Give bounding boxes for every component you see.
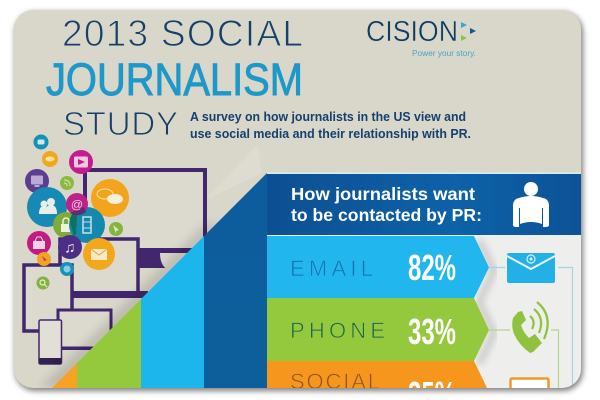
bubble: screen: [25, 169, 49, 193]
icon: social box: [510, 378, 548, 394]
laptop: [58, 310, 118, 350]
strip: orange: [52, 363, 77, 388]
strip: green: [77, 299, 141, 388]
row: email: 82%: [408, 247, 456, 288]
row: email: [267, 236, 489, 298]
header band: [267, 174, 581, 235]
strip: cyan: [141, 236, 204, 388]
bubble: speech: [91, 179, 129, 217]
bubble: music: ♫: [64, 240, 76, 256]
connector: phone: [489, 330, 558, 388]
subtitle: use social media and their relationship with PR.: [190, 127, 471, 141]
bubble: search: [36, 276, 50, 290]
bubble: small chat: [34, 134, 48, 150]
bubble: rss green: [60, 176, 74, 190]
row: phone: PHONE: [290, 318, 385, 343]
phone: [39, 320, 62, 364]
icon: phone: [512, 302, 548, 353]
bubble: cursor: [109, 222, 123, 236]
row: email: EMAIL: [290, 256, 373, 281]
bubble: mail: [83, 238, 115, 270]
desktop screen: [60, 239, 148, 298]
diagonal colour strips: [52, 173, 267, 388]
bubble: users: [27, 187, 67, 227]
social media bubbles: [25, 134, 129, 290]
row shadows: [479, 240, 494, 364]
bubble: film: [69, 207, 105, 243]
title: Journalism: JOURNALISM: [46, 54, 303, 105]
bubble: at sign: [66, 193, 88, 215]
connector: email: [489, 268, 572, 388]
fold shadow: [40, 225, 220, 388]
logo: Cision: Power your story.: [412, 48, 476, 58]
icon: person: [513, 182, 549, 227]
monitor: [85, 170, 205, 271]
panel: how journalists want to be contacted: [267, 172, 581, 400]
bubble: orange chat: [42, 151, 58, 167]
row: social: SOCIAL: [290, 369, 380, 394]
bubble: at sign: @: [71, 198, 83, 212]
title: 2013 Social: 2013 SOCIAL: [62, 13, 303, 54]
header text: to be contacted by PR:: [291, 205, 482, 225]
row: phone: 33%: [408, 311, 456, 352]
subtitle: [190, 110, 471, 141]
bubble: music: [58, 235, 82, 259]
header text: How journalists want: [291, 184, 475, 204]
logo: Cision: CISION: [366, 16, 458, 48]
logo: Cision: [367, 20, 476, 58]
bubble: rss teal: [60, 262, 74, 276]
row: social: [267, 361, 489, 400]
icon: envelope: [507, 253, 555, 283]
bubble: video: [69, 150, 93, 174]
paper fold highlight: [205, 145, 262, 200]
title: Study: STUDY: [63, 105, 178, 142]
subtitle: A survey on how journalists in the US view and: [190, 110, 466, 124]
panel background: [267, 173, 581, 388]
devices illustration: [24, 170, 205, 364]
bubble: small arrow: [37, 252, 51, 266]
panel top edge: [267, 172, 581, 174]
strip: dark blue: [204, 173, 267, 388]
bubble: lock: [53, 212, 72, 238]
bubble: bag: [27, 231, 51, 255]
row: phone: [267, 298, 489, 361]
header text: [291, 184, 482, 225]
tablet: [24, 265, 72, 331]
